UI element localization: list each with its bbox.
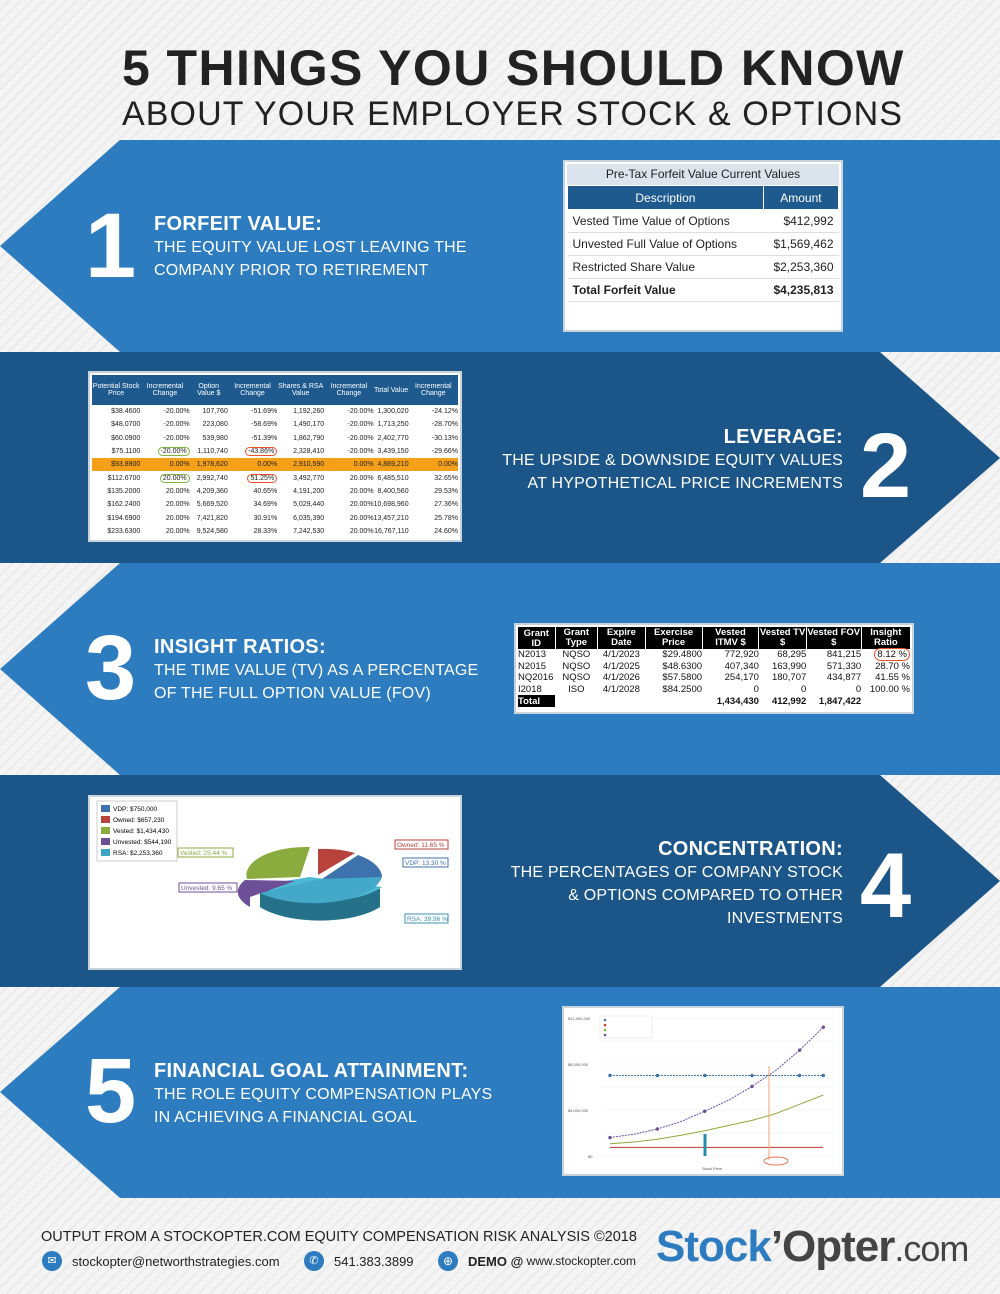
table: leverage: -30.13%	[432, 435, 458, 442]
table: insight ratios: 434,877	[827, 672, 861, 683]
table: leverage: Incremental Change	[415, 383, 452, 397]
title	[122, 40, 905, 133]
table: insight ratios: 254,170	[725, 672, 759, 683]
contact: demo: DEMO @	[468, 1254, 523, 1268]
contact: demo	[438, 1251, 636, 1271]
heading: leverage: LEVERAGE:	[724, 426, 843, 448]
table: leverage: -20.00%	[347, 435, 374, 442]
table: insight ratios: Expire Date	[607, 627, 636, 648]
table: forfeit value: Pre-Tax Forfeit Value Current Values	[606, 167, 800, 181]
table: leverage: 20.00%	[350, 488, 374, 495]
table: insight ratios: I2018	[518, 684, 542, 695]
table: leverage: $233.6300	[107, 528, 140, 535]
table: insight ratios: 68,295	[777, 649, 806, 660]
table: leverage: -58.69%	[251, 421, 277, 428]
line chart: financial goal: Stock Price	[702, 1166, 723, 1171]
table: leverage: 2,910,590	[293, 461, 324, 468]
table: insight ratios: 4/1/2026	[603, 672, 640, 683]
table: leverage: 13,457,210	[374, 515, 409, 522]
table: leverage: 539,980	[203, 435, 228, 442]
table: leverage: 2,328,410	[293, 448, 324, 455]
table: leverage: Option Value $	[197, 383, 220, 397]
table: leverage: $194.6900	[107, 515, 140, 522]
legend	[600, 1016, 652, 1038]
table: leverage: 6,035,390	[293, 515, 324, 522]
table: insight ratios: 8.12 %	[877, 649, 907, 660]
table: insight ratios	[514, 623, 914, 714]
table: leverage: Potential Stock Price	[93, 383, 139, 397]
heading: concentration: THE PERCENTAGES OF COMPANY STOCK & OPTIONS COMPARED TO OTHER INVESTMENTS	[511, 864, 843, 927]
heading: financial goal	[154, 1060, 492, 1126]
table: leverage: 7,242,530	[293, 528, 324, 535]
table: leverage: 25.78%	[434, 515, 458, 522]
table: leverage: $93.8900	[111, 461, 140, 468]
section 3 text	[85, 617, 478, 719]
table: insight ratios: NQSO	[562, 672, 590, 683]
table: insight ratios: NQSO	[562, 649, 590, 660]
section 4 text	[510, 835, 911, 937]
table: leverage: 6,485,510	[377, 475, 409, 482]
table: leverage: $162.2400	[107, 501, 140, 508]
heading: forfeit value: THE EQUITY VALUE LOST LEAVING THE COMPANY PRIOR TO RETIREMENT	[154, 239, 467, 279]
table: leverage: 0.00%	[354, 461, 374, 468]
table: leverage: -20.00%	[347, 448, 374, 455]
table: insight ratios: $48.6300	[662, 661, 702, 672]
table: insight ratios: 100.00 %	[870, 684, 910, 695]
table: leverage: 20.00%	[350, 528, 374, 535]
pie labels: RSA: 39.96 %	[407, 916, 448, 923]
table: insight ratios: 41.55 %	[875, 672, 910, 683]
contact: phone: ✆	[309, 1255, 319, 1267]
table: insight ratios: 1,434,430	[717, 696, 759, 706]
table: leverage: -51.39%	[251, 435, 277, 442]
table: forfeit value	[563, 160, 843, 332]
contact: phone	[304, 1251, 414, 1271]
heading: financial goal: FINANCIAL GOAL ATTAINMENT:	[154, 1060, 468, 1082]
table: forfeit value: $1,569,462	[773, 237, 834, 251]
pie labels: Owned: 11.65 %	[397, 842, 445, 849]
table: insight ratios: Grant Type	[564, 627, 589, 648]
table: insight ratios: 0	[754, 684, 759, 695]
table: leverage: $112.6700	[108, 475, 140, 482]
table: leverage: $75.1100	[112, 448, 140, 455]
pie labels	[178, 840, 448, 923]
table: insight ratios: N2015	[518, 661, 546, 672]
table: insight ratios: 412,992	[772, 696, 806, 706]
heading: leverage: THE UPSIDE & DOWNSIDE EQUITY VALUES AT HYPOTHETICAL PRICE INCREMENTS	[502, 452, 843, 492]
table: leverage: 16,767,110	[374, 528, 409, 535]
table: insight ratios: ISO	[568, 684, 585, 695]
section 2 text	[502, 415, 911, 517]
table: forfeit value: Total Forfeit Value	[572, 283, 676, 297]
table: leverage: -28.70%	[432, 421, 458, 428]
heading: leverage	[502, 426, 843, 492]
table: leverage: 107,760	[203, 408, 228, 415]
table: leverage: -20.00%	[347, 408, 374, 415]
table: leverage: 28.33%	[253, 528, 277, 535]
table: leverage: 29.53%	[434, 488, 458, 495]
table: leverage: 40.65%	[253, 488, 277, 495]
contact: email: stockopter@networthstrategies.com	[72, 1254, 280, 1268]
heading: forfeit value: FORFEIT VALUE:	[154, 213, 322, 235]
table: leverage: 10,698,960	[374, 501, 409, 508]
table: leverage: -51.69%	[251, 408, 277, 415]
heading: financial goal: THE ROLE EQUITY COMPENSATION PLAYS IN ACHIEVING A FINANCIAL GOAL	[154, 1086, 492, 1126]
table: leverage: 1,490,170	[293, 421, 324, 428]
table: leverage: 4,889,210	[377, 461, 409, 468]
table: insight ratios: Vested TV $	[760, 627, 805, 648]
number 5: 5	[85, 1040, 136, 1142]
table: leverage: Shares & RSA Value	[278, 383, 323, 397]
legend: VDP: $750,000	[113, 806, 157, 813]
table: insight ratios: 4/1/2025	[603, 661, 640, 672]
table: insight ratios: 163,990	[772, 661, 806, 672]
table: leverage: Incremental Change	[147, 383, 183, 397]
table: leverage: 20.00%	[166, 488, 190, 495]
line chart: financial goal	[562, 1006, 844, 1176]
table: insight ratios: 0	[856, 684, 861, 695]
legend: Owned: $657,230	[113, 817, 165, 824]
table: leverage: 51.25%	[250, 475, 274, 482]
table: forfeit value: $4,235,813	[773, 283, 834, 297]
table: forfeit value: $412,992	[783, 214, 834, 228]
table: insight ratios: 841,215	[827, 649, 861, 660]
table: insight ratios: 28.70 %	[875, 661, 910, 672]
table: leverage: 27.36%	[434, 501, 458, 508]
table: leverage: 20.00%	[166, 501, 190, 508]
table: leverage: 2,402,770	[377, 435, 409, 442]
table: leverage: Total Value	[374, 386, 408, 394]
table: forfeit value: Description	[635, 190, 695, 204]
table: leverage: -24.12%	[432, 408, 458, 415]
table: leverage: -20.00%	[164, 421, 190, 428]
pie labels: Vested: 25.44 %	[180, 850, 228, 857]
contact: phone: 541.383.3899	[334, 1254, 414, 1268]
table: leverage: -29.66%	[432, 448, 458, 455]
table: leverage: 20.00%	[350, 515, 374, 522]
table: insight ratios: Grant ID	[524, 628, 549, 649]
table: leverage: -20.00%	[164, 435, 190, 442]
table: forfeit value: Unvested Full Value of Options	[572, 237, 737, 251]
table: leverage: 0.00%	[170, 461, 190, 468]
heading: insight ratios: INSIGHT RATIOS:	[154, 636, 326, 658]
table: leverage: 34.69%	[253, 501, 277, 508]
section 1 text	[85, 195, 467, 297]
pie	[238, 847, 382, 921]
table: forfeit value: Amount	[780, 190, 822, 204]
table: insight ratios: 180,707	[772, 672, 806, 683]
table: leverage: -43.86%	[248, 448, 274, 455]
table: leverage: 8,400,560	[377, 488, 409, 495]
footer	[41, 1222, 968, 1271]
table: leverage: 4,209,360	[197, 488, 228, 495]
table: insight ratios: 571,330	[827, 661, 861, 672]
number 2: 2	[860, 415, 911, 517]
table: leverage	[88, 371, 462, 542]
table: leverage: 32.65%	[434, 475, 458, 482]
table: leverage: 1,300,020	[377, 408, 409, 415]
table: insight ratios: NQ2016	[518, 672, 553, 683]
section 5 text	[85, 1040, 492, 1142]
legend: RSA: $2,253,360	[113, 850, 163, 857]
contact: email	[42, 1251, 280, 1271]
title: 5 THINGS YOU SHOULD KNOW	[122, 40, 905, 96]
table: insight ratios: $29.4800	[662, 649, 702, 660]
table: leverage: 20.00%	[166, 515, 190, 522]
table: leverage: 4,191,200	[293, 488, 324, 495]
table: insight ratios: 407,340	[725, 661, 759, 672]
pie labels: VDP: 13.30 %	[405, 860, 446, 867]
table: leverage: 24.60%	[434, 528, 458, 535]
table: forfeit value: Vested Time Value of Options	[572, 214, 730, 228]
number 3: 3	[85, 617, 136, 719]
table: leverage: 1,862,790	[293, 435, 324, 442]
contact: demo: www.stockopter.com	[527, 1254, 636, 1268]
number 4: 4	[860, 835, 911, 937]
table: leverage: 3,439,150	[377, 448, 409, 455]
table: leverage: 1,713,250	[377, 421, 409, 428]
table: insight ratios: Vested ITMV $	[715, 627, 746, 648]
table: leverage: -20.00%	[164, 408, 190, 415]
table: insight ratios: 0	[801, 684, 806, 695]
legend: Unvested: $544,190	[113, 839, 172, 846]
table: leverage: 2,992,740	[197, 475, 228, 482]
contact: email: ✉	[47, 1255, 57, 1267]
table: forfeit value: $2,253,360	[773, 260, 834, 274]
line chart: financial goal: $0	[588, 1154, 593, 1159]
table: insight ratios: Insight Ratio	[870, 627, 901, 648]
contact: demo: ⊕	[443, 1254, 453, 1268]
table: insight ratios: 1,847,422	[819, 696, 861, 706]
table: leverage: 3,492,770	[293, 475, 324, 482]
pie labels: Unvested: 9.65 %	[181, 885, 233, 892]
table: leverage: 30.91%	[253, 515, 277, 522]
table: leverage: 20.00%	[163, 475, 187, 482]
table: leverage: 9,524,580	[197, 528, 228, 535]
table: leverage: $38.4600	[111, 408, 140, 415]
table: forfeit value: Restricted Share Value	[572, 260, 695, 274]
table: leverage: 20.00%	[350, 475, 374, 482]
table: insight ratios: $84.2500	[662, 684, 702, 695]
table: leverage: 1,192,260	[293, 408, 324, 415]
table: leverage: 20.00%	[350, 501, 374, 508]
table: insight ratios: 4/1/2028	[603, 684, 640, 695]
table: leverage: 20.00%	[166, 528, 190, 535]
line chart: financial goal: $8,000,000	[568, 1062, 589, 1067]
table: insight ratios: 772,920	[725, 649, 759, 660]
table: leverage: -20.00%	[161, 448, 187, 455]
legend	[97, 801, 177, 861]
logo: Stock’Opter.com	[656, 1222, 968, 1271]
table: insight ratios: 4/1/2023	[603, 649, 640, 660]
table: insight ratios: Total	[518, 696, 540, 706]
table: leverage: -20.00%	[347, 421, 374, 428]
line chart: financial goal: $12,000,000	[568, 1016, 591, 1021]
table: leverage: 223,080	[203, 421, 228, 428]
heading: forfeit value	[154, 213, 467, 279]
table: leverage: $135.2000	[107, 488, 140, 495]
footer credit: OUTPUT FROM A STOCKOPTER.COM EQUITY COMPENSATION RISK ANALYSIS ©2018	[41, 1229, 637, 1245]
heading: concentration: CONCENTRATION:	[658, 838, 843, 860]
table: leverage: 0.00%	[438, 461, 458, 468]
table: insight ratios: Exercise Price	[654, 627, 693, 648]
table: leverage: Incremental Change	[234, 383, 271, 397]
table: leverage: $48.0700	[111, 421, 140, 428]
heading: insight ratios: THE TIME VALUE (TV) AS A PERCENTAGE OF THE FULL OPTION VALUE (FOV)	[154, 662, 478, 702]
heading: insight ratios	[154, 636, 478, 702]
table: leverage: Incremental Change	[331, 383, 367, 397]
legend: Vested: $1,434,430	[113, 828, 169, 835]
table: leverage: 5,029,440	[293, 501, 324, 508]
table: leverage: 0.00%	[257, 461, 277, 468]
table: insight ratios: $57.5800	[662, 672, 702, 683]
table: insight ratios: N2013	[518, 649, 546, 660]
line chart: financial goal: $4,000,000	[568, 1108, 589, 1113]
title: ABOUT YOUR EMPLOYER STOCK & OPTIONS	[122, 95, 903, 133]
pie chart: concentration	[88, 795, 462, 970]
table: insight ratios: Vested FOV $	[807, 627, 860, 648]
table: leverage: 1,978,620	[197, 461, 228, 468]
table: leverage: 1,110,740	[197, 448, 228, 455]
number 1: 1	[85, 195, 136, 297]
table: leverage: 7,421,820	[197, 515, 228, 522]
table: leverage: 5,669,520	[197, 501, 228, 508]
table: insight ratios: NQSO	[562, 661, 590, 672]
table: leverage: $60.0900	[111, 435, 140, 442]
